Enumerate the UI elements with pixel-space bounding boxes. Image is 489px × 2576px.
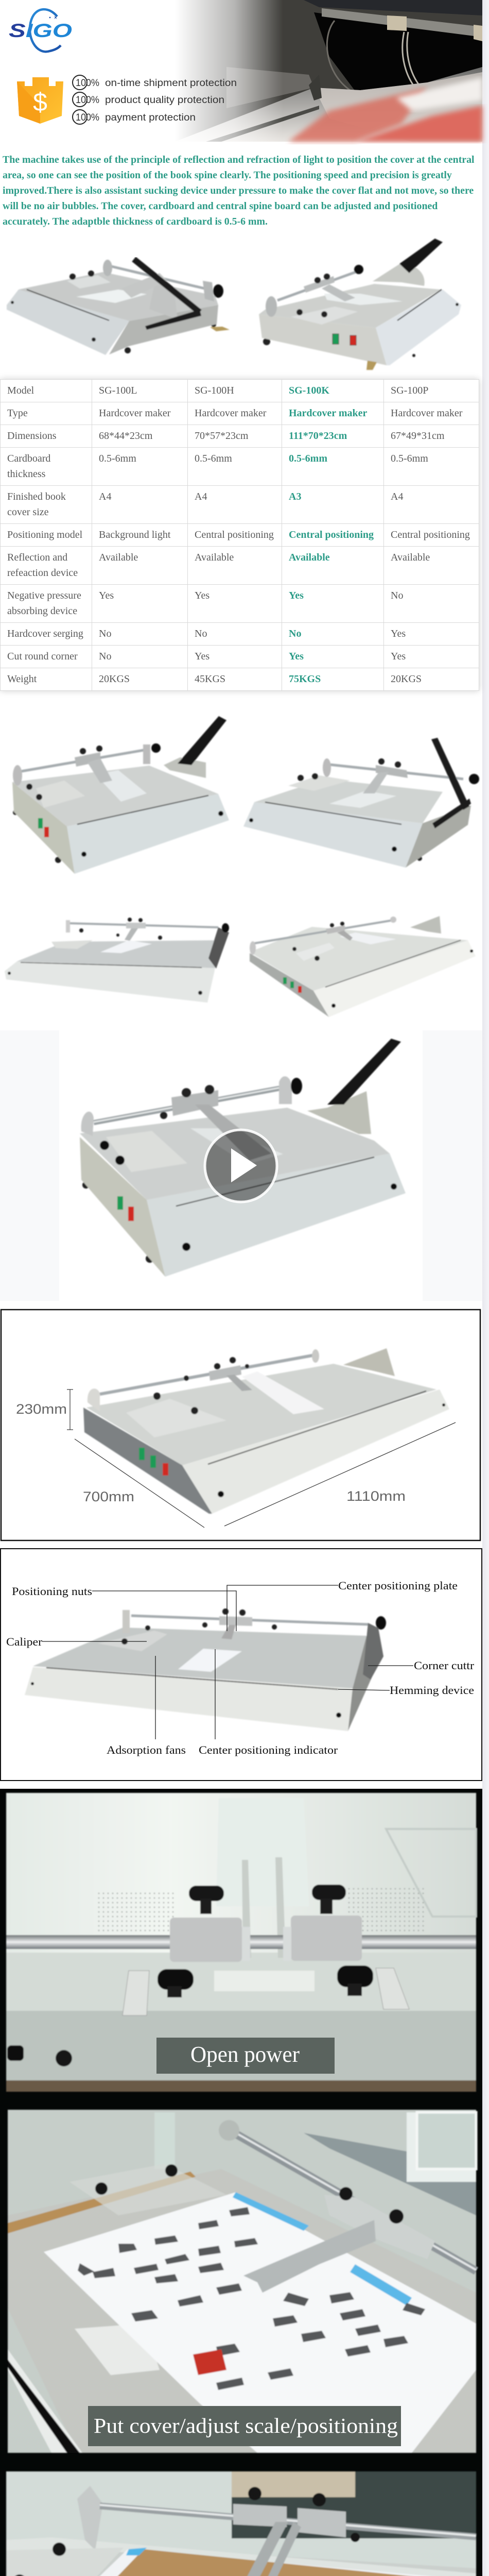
machine in video poster bbox=[80, 1039, 406, 1277]
specification table: 68*44*23cm bbox=[99, 430, 152, 442]
specification table: Dimensions bbox=[7, 430, 57, 442]
specification table: 0.5-6mm bbox=[289, 453, 327, 464]
specification table: 75KGS bbox=[289, 673, 321, 685]
icon: play button bbox=[205, 1130, 277, 1202]
specification table: A4 bbox=[391, 491, 403, 502]
machine photo: three-quarter view left bbox=[12, 716, 229, 874]
protection list: payment protection bbox=[105, 112, 196, 123]
machine in parts diagram bbox=[25, 1608, 386, 1731]
panel: machine dimensions bbox=[1, 1310, 480, 1540]
specification table: Central positioning bbox=[391, 529, 470, 540]
text block: product introduction: The machine takes use of the principle of reflection and refraction of light to position the cover at the central bbox=[3, 154, 475, 165]
machine outline with dimension view bbox=[83, 1348, 449, 1514]
specification table: No bbox=[99, 651, 111, 662]
specification table: Hardcover maker bbox=[289, 408, 367, 419]
callout: Corner cuttr: Corner cuttr bbox=[414, 1659, 475, 1672]
caption: Open power bbox=[156, 2038, 335, 2074]
specification table: Hardcover serging bbox=[7, 628, 83, 639]
specification table: Central positioning bbox=[195, 529, 274, 540]
specification table: 20KGS bbox=[99, 673, 130, 685]
specification table: Yes bbox=[391, 651, 406, 662]
specification table: 70*57*23cm bbox=[195, 430, 248, 442]
specification table: Available bbox=[99, 552, 138, 563]
specification table: cover size bbox=[7, 506, 49, 518]
specification table: refeaction device bbox=[7, 567, 78, 579]
specification table: Yes bbox=[99, 590, 114, 601]
text block: product introduction: area, so one can see the position of the book spine clearly. The positioning speed and precision is greatly bbox=[3, 170, 452, 181]
text block: product introduction: accurately. The adaptble thickness of cardboard is 0.5-6 mm. bbox=[3, 216, 268, 227]
callout: Positioning nuts: Positioning nuts bbox=[12, 1585, 92, 1598]
step 2 photo: put cover and adjust scale bbox=[8, 2110, 476, 2453]
callout: Caliper: Caliper bbox=[6, 1635, 43, 1648]
specification table: A4 bbox=[99, 491, 111, 502]
logo: SIGO: SIGO bbox=[9, 20, 72, 41]
leader lines bbox=[42, 1585, 413, 1739]
specification table: No bbox=[391, 590, 403, 601]
specification table: Negative pressure bbox=[7, 590, 81, 601]
machine photo: high angle with three switches bbox=[250, 916, 476, 1017]
specification table: 0.5-6mm bbox=[391, 453, 428, 464]
specification table: Hardcover maker bbox=[99, 408, 170, 419]
machine photo: three-quarter view right bbox=[243, 738, 479, 868]
specification table: Yes bbox=[195, 651, 209, 662]
specification table: No bbox=[99, 628, 111, 639]
logo: SIGO bbox=[9, 9, 72, 52]
text block: product introduction: improved.There is also assistant sucking device under pressure to make the cover flat and not move, so there bbox=[3, 185, 474, 196]
specification table: 111*70*23cm bbox=[289, 430, 347, 442]
specification table: Available bbox=[289, 552, 330, 563]
callout: Hemming device: Hemming device bbox=[390, 1684, 474, 1697]
specification table: 0.5-6mm bbox=[195, 453, 232, 464]
protection list: 100% bbox=[76, 95, 99, 106]
specification table: absorbing device bbox=[7, 605, 77, 617]
specification table: Reflection and bbox=[7, 552, 67, 563]
specification table: 20KGS bbox=[391, 673, 422, 685]
specification table: thickness bbox=[7, 468, 45, 480]
video: poster with side bars bbox=[0, 1030, 482, 1301]
dimension: 1110mm bbox=[224, 1422, 456, 1526]
protection list: product quality protection bbox=[105, 95, 224, 106]
specification table: 67*49*31cm bbox=[391, 430, 444, 442]
specification table: SG-100L bbox=[99, 385, 137, 396]
specification table: 0.5-6mm bbox=[99, 453, 136, 464]
dimension: 1110mm: 1110mm bbox=[346, 1488, 406, 1504]
dimension: 700mm: 700mm bbox=[83, 1489, 134, 1504]
icon: orange shield with dollar: $ bbox=[33, 88, 47, 116]
hero banner photo: printing machine bbox=[175, 0, 482, 142]
specification table: Cut round corner bbox=[7, 651, 78, 662]
specification table: SG-100H bbox=[195, 385, 234, 396]
specification table: Type bbox=[7, 408, 28, 419]
specification table: Yes bbox=[391, 628, 406, 639]
specification table: Yes bbox=[195, 590, 209, 601]
specification table: Cardboard bbox=[7, 453, 50, 464]
protection list: 100% bbox=[76, 112, 99, 123]
specification table: Central positioning bbox=[289, 529, 374, 540]
specification table: No bbox=[195, 628, 207, 639]
caption: Put cover/adjust scale/positioning bbox=[88, 2406, 401, 2446]
protection list: on-time shipment protection bbox=[105, 78, 237, 89]
protection list bbox=[73, 75, 237, 124]
dimension: 700mm bbox=[75, 1439, 204, 1528]
specification table: Positioning model bbox=[7, 529, 82, 540]
specification table bbox=[0, 379, 479, 691]
text block: product introduction bbox=[3, 154, 475, 227]
specification table: A4 bbox=[195, 491, 207, 502]
specification table: Available bbox=[195, 552, 234, 563]
specification table: Hardcover maker bbox=[391, 408, 462, 419]
dimension: 230mm bbox=[16, 1389, 73, 1430]
dimension: 230mm: 230mm bbox=[16, 1401, 67, 1417]
specification table: Model bbox=[7, 385, 34, 396]
panel: machine parts bbox=[1, 1549, 482, 1781]
machine photo: front view with black arm bbox=[7, 259, 230, 355]
caption: Open power: Open power bbox=[190, 2042, 300, 2067]
caption: Put cover/adjust scale/positioning: Put cover/adjust scale/positioning bbox=[94, 2414, 398, 2437]
callout: Center positioning indicator: Center positioning indicator bbox=[199, 1743, 338, 1756]
text block: product introduction: will be no air bubbles. The cover, cardboard and central spine board can be adjusted and positioned bbox=[3, 200, 438, 212]
specification table: Hardcover maker bbox=[195, 408, 266, 419]
step 3 photo: coating glue and cardboard bbox=[6, 2471, 476, 2576]
specification table: Yes bbox=[289, 590, 304, 601]
specification table: Yes bbox=[289, 651, 304, 662]
callout: Adsorption fans: Adsorption fans bbox=[107, 1743, 186, 1756]
machine photo: rear view with fan cutter bbox=[259, 239, 461, 370]
step 1 photo: open power bbox=[6, 1793, 476, 2092]
specification table: Weight bbox=[7, 673, 37, 685]
black step background bbox=[0, 1789, 482, 2576]
callout: Center positioning plate: Center positioning plate bbox=[338, 1579, 458, 1592]
specification table: SG-100P bbox=[391, 385, 428, 396]
specification table: Background light bbox=[99, 529, 170, 540]
specification table: Finished book bbox=[7, 491, 66, 502]
specification table: 45KGS bbox=[195, 673, 225, 685]
specification table: No bbox=[289, 628, 301, 639]
machine photo: low angle bbox=[5, 918, 229, 1003]
specification table: A3 bbox=[289, 491, 301, 502]
page side gutter bbox=[482, 0, 489, 2576]
protection list: 100% bbox=[76, 78, 99, 89]
specification table: SG-100K bbox=[289, 385, 329, 396]
icon: orange shield with dollar bbox=[17, 77, 63, 124]
specification table: Available bbox=[391, 552, 430, 563]
